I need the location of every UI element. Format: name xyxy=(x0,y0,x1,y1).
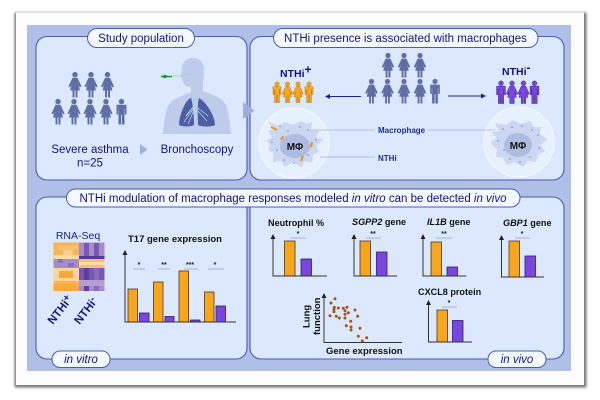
label: NTHi negative: - xyxy=(526,60,530,74)
chart: GBP1 gene: * xyxy=(521,231,524,238)
heading: study population: Study population xyxy=(98,33,184,45)
arrow: to bronchoscopy xyxy=(140,144,148,155)
icon group: NTHi negative patients xyxy=(497,81,539,104)
arrow: to NTHi positive xyxy=(329,96,361,98)
bar chart: T17 gene expression: ** xyxy=(161,262,167,269)
bar chart: T17 gene expression: * xyxy=(138,262,141,269)
scatter plot: lung function vs gene expression: Lung xyxy=(302,305,312,328)
chart: IL1B gene: IL1B gene xyxy=(427,217,470,227)
chart: SGPP2 gene: ** xyxy=(370,231,376,238)
text: severe asthma: n=25 xyxy=(77,158,103,170)
panel: study population xyxy=(36,28,247,180)
chart: neutrophil xyxy=(268,218,327,276)
bar chart: T17 gene expression: * xyxy=(214,262,217,269)
tag: in vivo xyxy=(488,351,546,368)
heading: NTHi modulation: NTHi modulation of macrophage responses modeled in vitro can be detected in vivo xyxy=(79,193,507,205)
scatter plot: lung function vs gene expression xyxy=(302,297,403,357)
text: bronchoscopy: Bronchoscopy xyxy=(161,144,234,156)
chart: CXCL8 protein: * xyxy=(448,300,451,307)
panel: in vitro xyxy=(36,197,247,368)
chart: IL1B gene xyxy=(423,217,470,276)
bar chart: T17 gene expression: *** xyxy=(186,262,194,269)
scatter plot: lung function vs gene expression: function xyxy=(312,297,323,335)
chart: neutrophil: * xyxy=(297,231,300,238)
label: RNA-Seq: RNA-Seq xyxy=(56,230,100,242)
heading: NTHi presence xyxy=(274,28,538,48)
chart: SGPP2 gene xyxy=(352,217,406,276)
callout: macrophage: Macrophage xyxy=(378,126,426,135)
chart: GBP1 gene xyxy=(502,218,552,277)
macrophage: NTHi positive: MΦ xyxy=(287,142,303,153)
panel: NTHi presence xyxy=(250,28,564,180)
label: NTHi positive: + xyxy=(304,62,312,76)
bar chart: T17 gene expression xyxy=(125,254,236,322)
illustration: bronchoscopy lungs xyxy=(161,58,231,134)
tag: in vitro xyxy=(52,351,110,368)
macrophage: NTHi negative xyxy=(484,107,554,177)
chart: CXCL8 protein: CXCL8 protein xyxy=(418,287,481,297)
heatmap xyxy=(54,242,104,291)
arrow: between top panels xyxy=(243,102,254,119)
heading: NTHi presence: NTHi presence is associated with macrophages xyxy=(284,33,527,45)
label: NTHi negative rotated: NTHi xyxy=(72,298,98,327)
tag: in vivo: in vivo xyxy=(501,354,534,366)
icon group: all patients xyxy=(365,53,440,104)
heading: study population xyxy=(88,28,194,48)
text: severe asthma: Severe asthma xyxy=(51,144,129,156)
macrophage: NTHi negative: MΦ xyxy=(510,141,526,152)
scatter plot: lung function vs gene expression: Gene expression xyxy=(326,346,403,357)
panel: in vivo xyxy=(250,197,564,368)
callout: NTHi: NTHi xyxy=(378,154,397,163)
icon group: NTHi positive patients xyxy=(273,82,313,103)
heading: NTHi modulation xyxy=(66,189,520,207)
label: NTHi positive: NTHi xyxy=(280,68,304,80)
chart: GBP1 gene: GBP1 gene xyxy=(503,218,552,228)
label: NTHi negative rotated: - xyxy=(87,294,98,304)
chart: neutrophil: Neutrophil % xyxy=(268,218,324,228)
icon group: patients xyxy=(52,72,126,124)
arrow: to NTHi negative xyxy=(448,95,482,97)
callout: NTHi xyxy=(320,154,397,163)
label: NTHi negative: NTHi xyxy=(502,66,526,78)
label: NTHi positive rotated: + xyxy=(61,292,73,304)
macrophage: NTHi positive xyxy=(259,108,329,178)
tag: in vitro: in vitro xyxy=(64,354,99,366)
label: NTHi positive rotated: NTHi xyxy=(46,298,72,327)
chart: IL1B gene: ** xyxy=(441,231,447,238)
chart: CXCL8 protein xyxy=(418,287,481,342)
chart: SGPP2 gene: SGPP2 gene xyxy=(352,217,406,227)
chart title: T17 gene expression: T17 gene expression xyxy=(128,234,222,245)
